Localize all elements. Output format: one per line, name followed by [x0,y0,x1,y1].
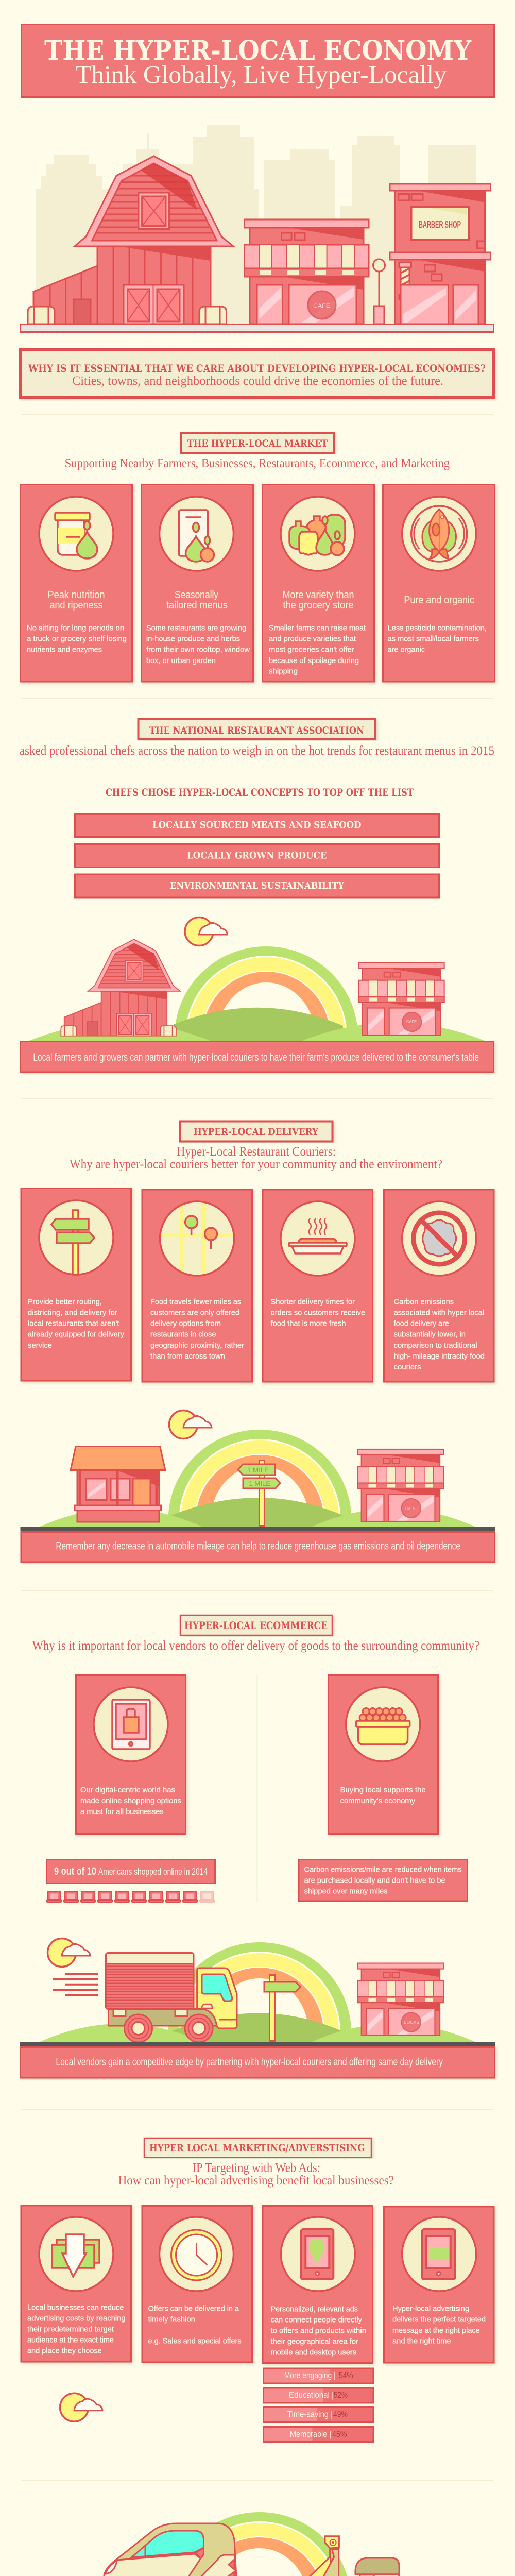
panel: personalized ads: Personalized, relevant ads [271,2305,358,2313]
laptop pictogram row [47,1892,214,1902]
delivery subtitle: Hyper-Local Restaurant Couriers: [177,1145,336,1159]
chefs heading: CHEFS CHOSE HYPER-LOCAL CONCEPTS TO TOP OFF THE LIST [106,786,414,799]
panel: personalized ads [263,2206,373,2363]
callout: carbon per mile [299,1860,468,1901]
illustration: farm and cafe landscape [29,917,485,1041]
panel: lower carbon emissions [384,1190,494,1382]
panel: personalized ads: can connect people directly [271,2315,362,2325]
panel: seasonal menus: in-house produce and herbs [146,635,240,643]
panel: better routing: service [28,1341,52,1350]
scooter [303,2536,402,2576]
illustration: delivery truck and bookstore [20,1938,495,2046]
illustration: smart car and scooter [20,2512,495,2576]
market subtitle: Supporting Nearby Farmers, Businesses, Restaurants, Ecommerce, and Marketing [65,456,450,470]
lamp post [373,259,385,324]
ecommerce subtitle: Why is it important for local vendors to offer delivery of goods to the surrounding community? [32,1639,479,1653]
panel: seasonal menus: tailored menus [166,600,228,611]
panel: better routing [21,1188,131,1381]
panel: better routing: already equipped for delivery [28,1330,124,1339]
icon: sun and cloud [47,1938,90,1967]
illustration: house, signpost and cafe [21,1411,495,1531]
panel: shorter delivery times: orders so customers receive [271,1309,365,1317]
ground strip [21,325,493,332]
bar: time-saving 49% [264,2407,373,2422]
road [21,1527,495,1531]
panel: personalized ads: mobile and desktop users [271,2348,356,2357]
section heading: hyper-local delivery [180,1121,333,1142]
panel: targeted message: and the right time [392,2337,451,2346]
section heading: marketing and advertising [144,2138,371,2158]
bar: time-saving 49%: 49% [333,2409,348,2419]
panel: personalized ads: to offers and products within [271,2327,366,2335]
panel: more variety: the grocery store [283,600,353,611]
stat: 9 out of 10 shoppers: Americans shopped online in 2014 [98,1867,208,1877]
panel: lower carbon emissions: food delivery are [394,1319,449,1328]
panel: targeted message: delivers the perfect targeted [392,2315,486,2324]
section heading: national restaurant association: THE NATIONAL RESTAURANT ASSOCIATION [149,725,364,736]
hills [40,2013,475,2042]
panel: lower carbon emissions: substantially lower, in [394,1330,466,1339]
concept bar 1 [75,814,439,837]
delivery subtitle: Why are hyper-local couriers better for your community and the environment? [70,1157,442,1172]
panel: seasonal menus: box, or urban garden [146,656,216,665]
cafe [244,219,369,324]
icon: jar and pear [39,497,113,571]
smart car [104,2523,237,2576]
panel: buying local: community's economy [340,1797,416,1805]
panel: shorter delivery times: food that is more fresh [271,1319,346,1328]
concept bar 3: ENVIRONMENTAL SUSTAINABILITY [170,880,344,891]
panel: targeted message: message at the right place [392,2326,480,2335]
cafe [357,1449,443,1521]
concept bar 2: LOCALLY GROWN PRODUCE [187,850,327,861]
cafe bookstore [357,1963,443,2036]
hero illustration: city skyline with barn and shops [21,125,493,332]
section heading: the hyper-local market [181,433,334,453]
icon: phone with location pin [281,2217,355,2291]
panel: more variety: because of spoilage during [269,656,359,665]
panel: peak nutrition: nutrients and enzymes [27,645,102,654]
hills [29,1008,485,1041]
panel: fewer miles: delivery options from [150,1319,221,1328]
section heading: hyper-local ecommerce: HYPER-LOCAL ECOMMERCE [184,1619,328,1632]
icon: no carbon cloud [402,1201,476,1276]
panel: seasonal menus: Seasonally [175,589,218,601]
panel: better routing: local restaurants that aren't [28,1319,119,1328]
barn [28,156,233,324]
icon: hot plate [281,1201,355,1276]
panel: digital-centric world: Our digital-centric world has [80,1786,175,1794]
hills [40,1498,475,1527]
panel: better routing: Provide better routing, [28,1298,102,1307]
list of top concepts [75,814,439,897]
panel: peak nutrition: No sitting for long periods on [27,623,124,633]
bar: more engaging 54% [264,2368,373,2383]
cafe: CAFE [406,1020,417,1024]
panel: seasonal menus: Some restaurants are growing [146,623,246,633]
panel: buying local [329,1675,438,1834]
marketing subtitle [118,2161,394,2188]
title banner: THE HYPER-LOCAL ECONOMY [44,35,472,66]
panel: reduce advertising costs [21,2206,131,2362]
panel: pure and organic: as most small/local farmers [387,635,479,643]
bar: more engaging 54%: More engaging | [284,2370,336,2380]
panel: lower carbon emissions: high- mileage intracity food [394,1352,485,1361]
icon: tablet with bag [94,1687,168,1761]
section heading: national restaurant association [138,719,375,739]
caption: mileage [21,1532,494,1562]
panel: timely offers: Offers can be delivered in a [148,2304,239,2313]
panel: lower carbon emissions: associated with hyper local [394,1309,484,1317]
icon: sun and cloud [60,2393,102,2421]
bar: memorable 45% [264,2427,373,2442]
section heading: hyper-local delivery: HYPER-LOCAL DELIVERY [194,1126,318,1138]
icon: sun and cloud [185,917,228,946]
section heading: marketing and advertising: HYPER LOCAL MARKETING/ADVERSTISING [149,2142,365,2154]
house [71,1447,165,1522]
barber shop [390,184,490,324]
panel: reduce advertising costs: audience at the exact time [27,2336,114,2344]
panel: pure and organic [383,484,494,682]
icon: money and down arrow [39,2217,113,2291]
panel: more variety: More variety than [282,589,354,601]
cafe [358,963,444,1035]
callout: carbon per mile: are purchased locally and don't have to be [304,1876,445,1885]
panel: more variety: most groceries can't offer [269,645,354,654]
delivery subtitle [70,1145,442,1172]
panel: peak nutrition [21,484,132,682]
stat: 9 out of 10 shoppers: 9 out of 10 [54,1866,96,1877]
panel: better routing: districting, and delivery for [28,1309,117,1317]
panel: pure and organic: Less pesticide contamination, [387,623,487,633]
panel: personalized ads: their geographical area for [271,2337,358,2346]
panel: seasonal menus: from their own rooftop, window [146,645,250,654]
panel: fewer miles: Food travels fewer miles as [150,1298,241,1307]
panel: more variety: Smaller farms can raise meat [269,623,366,633]
panel: timely offers [142,2206,252,2362]
barber shop: BARBER SHOP [419,219,461,230]
panel: shorter delivery times: Shorter delivery times for [271,1298,355,1307]
caption: vendors [21,2047,494,2078]
cafe bookstore: BOOKS [404,2020,419,2025]
intro question panel [21,349,493,398]
bar: time-saving 49%: Time-saving | [287,2409,333,2419]
rainbow [168,1430,352,1520]
rainbow [175,946,358,1037]
bar chart: ad qualities [264,2368,373,2442]
panel: reduce advertising costs: Local businesses can reduce [27,2303,124,2312]
panel: digital-centric world [76,1675,185,1834]
signpost: one mile: 1 MILE [249,1479,270,1487]
intro question panel: Cities, towns, and neighborhoods could drive the economies of the future. [72,374,443,388]
signpost [264,1975,301,2041]
icon: map pins [160,1201,234,1276]
rainbow [168,1942,351,2032]
panel: targeted message: Hyper-local advertising [392,2304,469,2313]
bar: educational 52%: Educational | [289,2390,334,2400]
panel: fewer miles: than from across town [150,1352,225,1361]
panel: timely offers: e.g. Sales and special offers [148,2337,242,2346]
road [20,2042,495,2046]
panel: peak nutrition: and ripeness [49,600,103,611]
signpost: one mile: 1 MILE [247,1466,269,1474]
icon: vegetables [281,497,355,571]
marketing subtitle: IP Targeting with Web Ads: [193,2161,320,2175]
delivery truck [106,1953,237,2042]
speed lines [53,1974,98,1995]
panel: seasonal menus [141,484,253,682]
panel: timely offers: timely fashion [148,2315,195,2324]
barn [61,939,180,1036]
bar: memorable 45%: Memorable | [290,2429,331,2439]
icon: basket of produce [346,1687,420,1761]
concept bar 3 [75,874,439,897]
panel: digital-centric world: a must for all businesses [80,1807,164,1816]
rainbow [168,2512,351,2576]
title banner: Think Globally, Live Hyper-Locally [76,60,447,89]
panel: lower carbon emissions: couriers [394,1363,421,1371]
section heading: the hyper-local market: THE HYPER-LOCAL MARKET [187,438,328,449]
bar: educational 52%: 52% [334,2390,348,2400]
panel: targeted message [384,2207,494,2363]
panel: reduce advertising costs: advertising costs by reaching [27,2314,126,2323]
panel: peak nutrition: Peak nutrition [47,589,105,601]
skyline silhouette [36,125,476,324]
title banner [22,25,494,97]
panel: more variety: and produce varieties that [269,635,356,643]
panel: digital-centric world: made online shopping options [80,1797,181,1805]
bar: memorable 45%: 45% [332,2429,347,2439]
panel: more variety: shipping [269,667,298,676]
callout: carbon per mile: shipped over many miles [304,1887,388,1896]
panel: more variety [263,484,374,682]
panel: reduce advertising costs: and place they choose [27,2346,102,2355]
cafe: CAFE [405,1506,416,1511]
panel: pure and organic: are organic [387,645,425,654]
concept bar 2 [75,844,439,868]
stat: 9 out of 10 shoppers [46,1860,215,1884]
bar: more engaging 54%: 54% [339,2370,353,2380]
caption: farmers [21,1042,493,1072]
panel: buying local: Buying local supports the [340,1786,426,1794]
panel: shorter delivery times [263,1190,373,1382]
panel: lower carbon emissions: comparison to traditional [394,1341,477,1350]
panel: reduce advertising costs: their predetermined target [27,2325,114,2334]
icon: fish on plate [402,497,476,571]
panel: fewer miles: customers are only offered [150,1309,239,1317]
panel: fewer miles [142,1190,252,1382]
section heading: hyper-local ecommerce [180,1615,332,1635]
icon: signpost [39,1200,113,1275]
icon: clock [160,2217,234,2291]
bar: educational 52% [264,2388,373,2403]
icon: menu and pear [160,497,234,571]
marketing subtitle: How can hyper-local advertising benefit local businesses? [118,2174,394,2188]
panel: fewer miles: restaurants in close [150,1330,216,1339]
cafe: CAFE [313,303,330,309]
concept bar 1: LOCALLY SOURCED MEATS AND SEAFOOD [152,819,362,831]
signpost: one mile [238,1460,280,1526]
callout: carbon per mile: Carbon emissions/mile are reduced when items [304,1865,462,1874]
panel: pure and organic: Pure and organic [404,595,474,606]
panel: lower carbon emissions: Carbon emissions [394,1298,454,1307]
panel: fewer miles: geographic proximity, rather [150,1341,244,1350]
icon: sun and cloud [169,1411,212,1438]
panel: peak nutrition: a truck or grocery shelf losing [27,635,127,643]
icon: phone with ad [402,2217,476,2291]
